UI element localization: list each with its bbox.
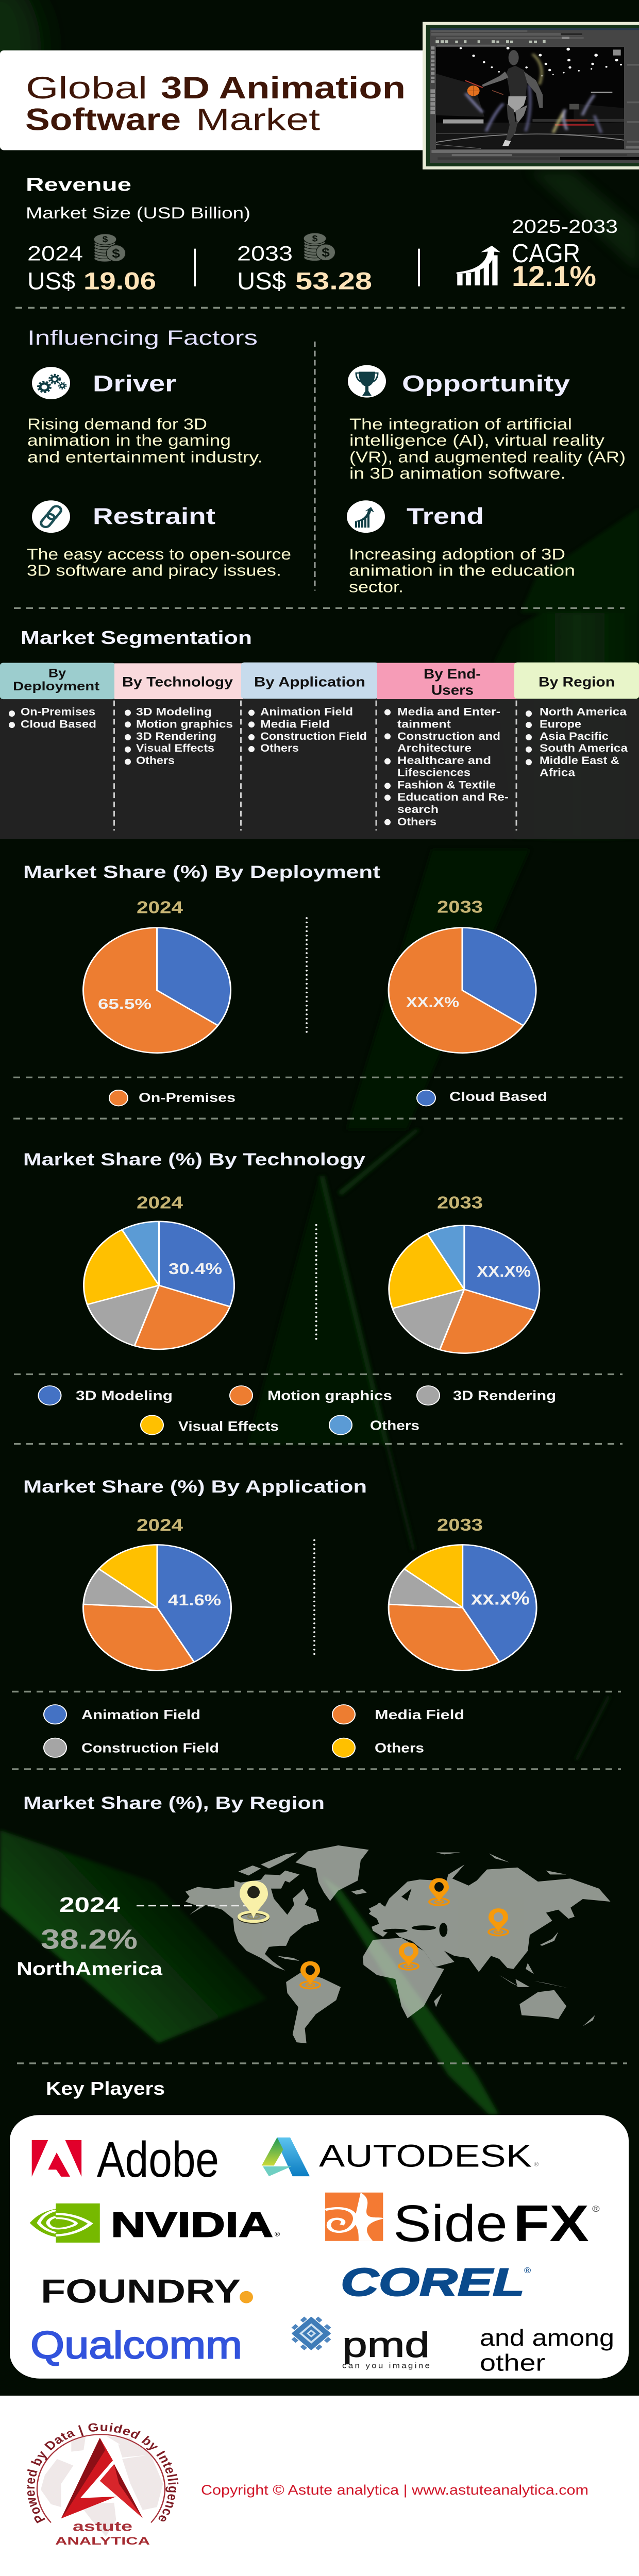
heading: Market Share (%) By Application xyxy=(23,1477,367,1496)
stat: 2024 revenue xyxy=(27,243,156,295)
year label 2024: 2024 xyxy=(137,1193,183,1212)
list: deployment: Cloud Based xyxy=(21,718,96,730)
icon: coins 2024: $ xyxy=(103,235,108,244)
legend: application xyxy=(44,1705,464,1757)
heading: Market Share (%) By Deployment xyxy=(23,862,380,882)
connector line xyxy=(137,1905,255,1907)
robot figure xyxy=(465,50,579,146)
pie chart 2033 xyxy=(389,1225,540,1353)
legend: technology xyxy=(38,1386,556,1435)
title text: Market xyxy=(196,101,320,137)
icon: highlighted pin north america xyxy=(239,1881,268,1922)
icon: coins 2033: $ xyxy=(322,245,330,260)
heading: influencing factors: Influencing Factors xyxy=(27,327,258,349)
heading: market segmentation: Market Segmentation xyxy=(21,628,252,648)
legend: technology: 3D Modeling xyxy=(76,1388,173,1403)
legend: technology: Others xyxy=(370,1418,419,1433)
world map xyxy=(186,1845,611,2043)
pie chart 2033: xx.x% xyxy=(471,1587,530,1609)
icon: coins 2033 xyxy=(304,233,335,261)
legend: application: Others xyxy=(375,1741,424,1755)
list: technology: 3D Rendering xyxy=(136,730,216,742)
legend: deployment: Cloud Based xyxy=(449,1090,547,1104)
trend text: animation in the education xyxy=(349,562,575,580)
restraint text xyxy=(27,546,291,580)
text: and among other xyxy=(480,2325,614,2376)
list: application xyxy=(248,705,367,754)
logo: autodesk: AUTODESK xyxy=(319,2139,532,2174)
segment header: by end-users xyxy=(377,663,516,699)
region callout: NorthAmerica xyxy=(16,1959,162,1979)
opportunity text: intelligence (AI), virtual reality xyxy=(349,432,604,449)
list: end-users: Lifesciences xyxy=(397,766,470,778)
logo: adobe xyxy=(32,2131,219,2188)
pie chart 2024: 65.5% xyxy=(98,996,152,1012)
year label 2033: 2033 xyxy=(437,897,483,917)
list: end-users: Education and Re- xyxy=(397,791,509,803)
legend: deployment xyxy=(109,1090,547,1106)
pie chart 2024: 41.6% xyxy=(168,1592,221,1609)
restraint text: The easy access to open-source xyxy=(27,546,291,563)
pie chart 2024: 30.4% xyxy=(169,1260,222,1278)
list: end-users: Construction and xyxy=(397,730,500,742)
logo: astute analytica: Powered by Data | Guided by Intelligence xyxy=(27,2423,178,2523)
logo: nvidia xyxy=(30,2204,280,2244)
right panel xyxy=(624,47,639,149)
segment header: by deployment: Deployment xyxy=(13,679,99,693)
market size label: Market Size (USD Billion) xyxy=(26,205,250,222)
list: technology: Others xyxy=(136,754,175,766)
icon: gears xyxy=(32,367,70,399)
logo: nvidia: ® xyxy=(275,2231,280,2238)
logo: sidefx: Side xyxy=(393,2195,508,2252)
list: region: Europe xyxy=(540,718,581,730)
legend: application: Construction Field xyxy=(81,1741,219,1755)
icon: coins 2024 xyxy=(94,234,126,262)
title text: 3D Animation xyxy=(161,70,406,105)
driver label: Driver xyxy=(93,371,176,397)
year label 2024: 2024 xyxy=(137,1515,183,1535)
icon: pin europe xyxy=(429,1878,449,1905)
title text: Global xyxy=(26,70,147,105)
title text: Software xyxy=(25,101,181,137)
heading: key players: Key Players xyxy=(46,2078,165,2099)
segment header: by technology: By Technology xyxy=(122,674,233,690)
year label 2024: 2024 xyxy=(137,897,183,917)
list: end-users: Media and Enter- xyxy=(397,705,500,718)
divider xyxy=(194,249,196,286)
panel: market share by region xyxy=(16,1793,611,2043)
icon: pin south america xyxy=(300,1961,320,1989)
icon: trophy xyxy=(348,365,386,398)
list: end-users: Architecture xyxy=(397,742,472,754)
restraint text: 3D software and piracy issues. xyxy=(27,562,281,580)
segment header: by application xyxy=(241,663,378,699)
opportunity text: The integration of artificial xyxy=(349,416,572,433)
stat: CAGR xyxy=(512,217,618,292)
list: application: Others xyxy=(260,742,299,754)
legend: technology: 3D Rendering xyxy=(453,1388,556,1403)
icon: trend chart xyxy=(347,500,385,533)
trend label: Trend xyxy=(407,504,484,529)
stat: 2033 revenue: US$ xyxy=(237,268,286,295)
text: and among other: other xyxy=(480,2349,545,2376)
text: and among other: and among xyxy=(480,2325,614,2351)
legend: deployment: On-Premises xyxy=(139,1091,236,1105)
list: region xyxy=(526,705,628,778)
list: end-users xyxy=(384,705,509,827)
pie chart 2024 xyxy=(83,1545,231,1670)
opportunity label: Opportunity xyxy=(402,371,570,397)
stat: 2033 revenue: 53.28 xyxy=(295,268,372,295)
list: region: Asia Pacific xyxy=(540,730,609,742)
opportunity text xyxy=(349,416,626,482)
year label 2033: 2033 xyxy=(437,1515,483,1534)
pie chart 2033: XX.X% xyxy=(406,994,459,1010)
list: application: Construction Field xyxy=(260,730,367,742)
segment header: by deployment xyxy=(0,663,115,699)
viewport xyxy=(436,47,624,149)
icon: coins 2024: $ xyxy=(112,246,120,260)
list: end-users: search xyxy=(397,803,439,816)
logo: pmd: can you imagine xyxy=(342,2362,430,2370)
icon: pin asia xyxy=(489,1908,508,1936)
restraint label: Restraint xyxy=(93,504,215,529)
panel: market share by technology xyxy=(23,1149,540,1353)
title banner xyxy=(0,50,428,150)
heading: Market Share (%), By Region xyxy=(23,1793,325,1813)
stat: 2024 revenue: US$ xyxy=(27,268,75,295)
segment header: by deployment: By xyxy=(48,666,66,680)
logo: corel: COREL xyxy=(341,2260,525,2304)
driver text: and entertainment industry. xyxy=(27,449,263,466)
list: application: Animation Field xyxy=(260,705,353,718)
footer xyxy=(0,2396,639,2576)
stat: CAGR: CAGR xyxy=(512,239,580,268)
pie chart 2033 xyxy=(389,1545,536,1670)
panel: market share by application xyxy=(23,1477,536,1670)
stat: CAGR: 12.1% xyxy=(512,260,596,292)
list: deployment xyxy=(9,705,96,730)
trend text: sector. xyxy=(349,579,403,596)
pie chart 2033 xyxy=(389,928,536,1053)
segment header: by technology xyxy=(114,663,243,699)
region callout: 38.2% xyxy=(41,1924,138,1955)
stat: 2033 revenue: 2033 xyxy=(237,243,293,265)
logo: autodesk: ® xyxy=(534,2161,539,2167)
logo: sidefx xyxy=(325,2193,600,2252)
list: technology: 3D Modeling xyxy=(136,705,212,718)
logo: astute analytica: ANALYTICA xyxy=(55,2535,150,2547)
legend: technology: Visual Effects xyxy=(178,1419,279,1434)
driver text: animation in the gaming xyxy=(27,432,231,449)
pie chart 2033: XX.X% xyxy=(477,1263,531,1280)
logo: pmd xyxy=(284,2311,430,2370)
stat: 2033 revenue xyxy=(237,243,372,295)
panel: key players logos xyxy=(10,2115,629,2379)
list: region: South America xyxy=(540,742,628,754)
segment header: by region xyxy=(514,663,639,699)
list: application: Media Field xyxy=(260,718,330,730)
revenue section xyxy=(26,175,618,295)
revenue heading: Revenue xyxy=(26,175,131,195)
list: end-users: Others xyxy=(397,816,436,827)
list: technology: Visual Effects xyxy=(136,742,214,754)
year label 2033: 2033 xyxy=(437,1193,483,1212)
trend text xyxy=(349,546,575,596)
segment header: by application: By Application xyxy=(254,674,365,690)
legend: technology: Motion graphics xyxy=(267,1388,392,1403)
logo: sidefx: FX xyxy=(513,2195,589,2252)
panel: influencing factors xyxy=(27,327,626,596)
logo: nvidia: NVIDIA xyxy=(111,2205,273,2244)
list: region: North America xyxy=(540,705,627,718)
icon: chain link xyxy=(32,500,70,533)
icon: growth arrow chart xyxy=(457,246,500,285)
segment header: by end-users: By End- xyxy=(424,666,481,682)
list: technology xyxy=(125,705,233,766)
icon: pin middle east and africa xyxy=(399,1942,418,1970)
list: technology: Motion graphics xyxy=(136,718,233,730)
pie chart 2024 xyxy=(84,1222,234,1349)
driver text xyxy=(27,416,263,466)
logo: foundry: FOUNDRY xyxy=(41,2273,241,2310)
driver text: Rising demand for 3D xyxy=(27,416,207,433)
table body background xyxy=(0,699,639,839)
logo: sidefx: ® xyxy=(592,2204,600,2214)
logo: corel: ® xyxy=(524,2266,531,2275)
list: deployment: On-Premises xyxy=(21,705,95,718)
stat: CAGR: 2025-2033 xyxy=(512,217,618,237)
divider xyxy=(418,249,420,286)
segment header: by end-users: Users xyxy=(431,683,474,698)
logo: autodesk xyxy=(262,2138,539,2176)
list: region: Middle East & xyxy=(540,754,619,766)
list: end-users: tainment xyxy=(397,718,451,730)
stat: 2024 revenue: 19.06 xyxy=(83,268,156,295)
legend: application: Animation Field xyxy=(81,1707,200,1722)
logo: adobe: Adobe xyxy=(97,2131,219,2188)
list: region: Africa xyxy=(540,766,576,778)
legend: application: Media Field xyxy=(375,1707,464,1722)
trend text: Increasing adoption of 3D xyxy=(349,546,565,563)
pie chart 2024 xyxy=(83,928,231,1053)
stat: 2024 revenue: 2024 xyxy=(27,243,83,265)
icon: coins 2033: $ xyxy=(312,234,317,243)
header image: 3D software screenshot xyxy=(423,22,639,170)
list: end-users: Fashion & Textile xyxy=(397,778,496,791)
logo: pmd: pmd xyxy=(342,2325,430,2364)
opportunity text: (VR), and augmented reality (AR) xyxy=(349,449,626,466)
panel: market share by deployment xyxy=(23,862,536,1053)
region callout: 2024 xyxy=(59,1893,120,1917)
panel: market segmentation table xyxy=(0,663,639,839)
list: end-users: Healthcare and xyxy=(397,754,491,766)
logo: astute analytica: astute xyxy=(73,2519,132,2534)
opportunity text: in 3D animation software. xyxy=(349,465,566,482)
heading: Market Share (%) By Technology xyxy=(23,1149,365,1169)
logo: qualcomm: Qualcomm xyxy=(30,2324,242,2367)
region callout xyxy=(16,1893,162,1979)
title text xyxy=(25,70,406,137)
copyright text: Copyright © Astute analytica | www.astuteanalytica.com xyxy=(201,2482,588,2498)
segment header: by region: By Region xyxy=(539,674,615,690)
